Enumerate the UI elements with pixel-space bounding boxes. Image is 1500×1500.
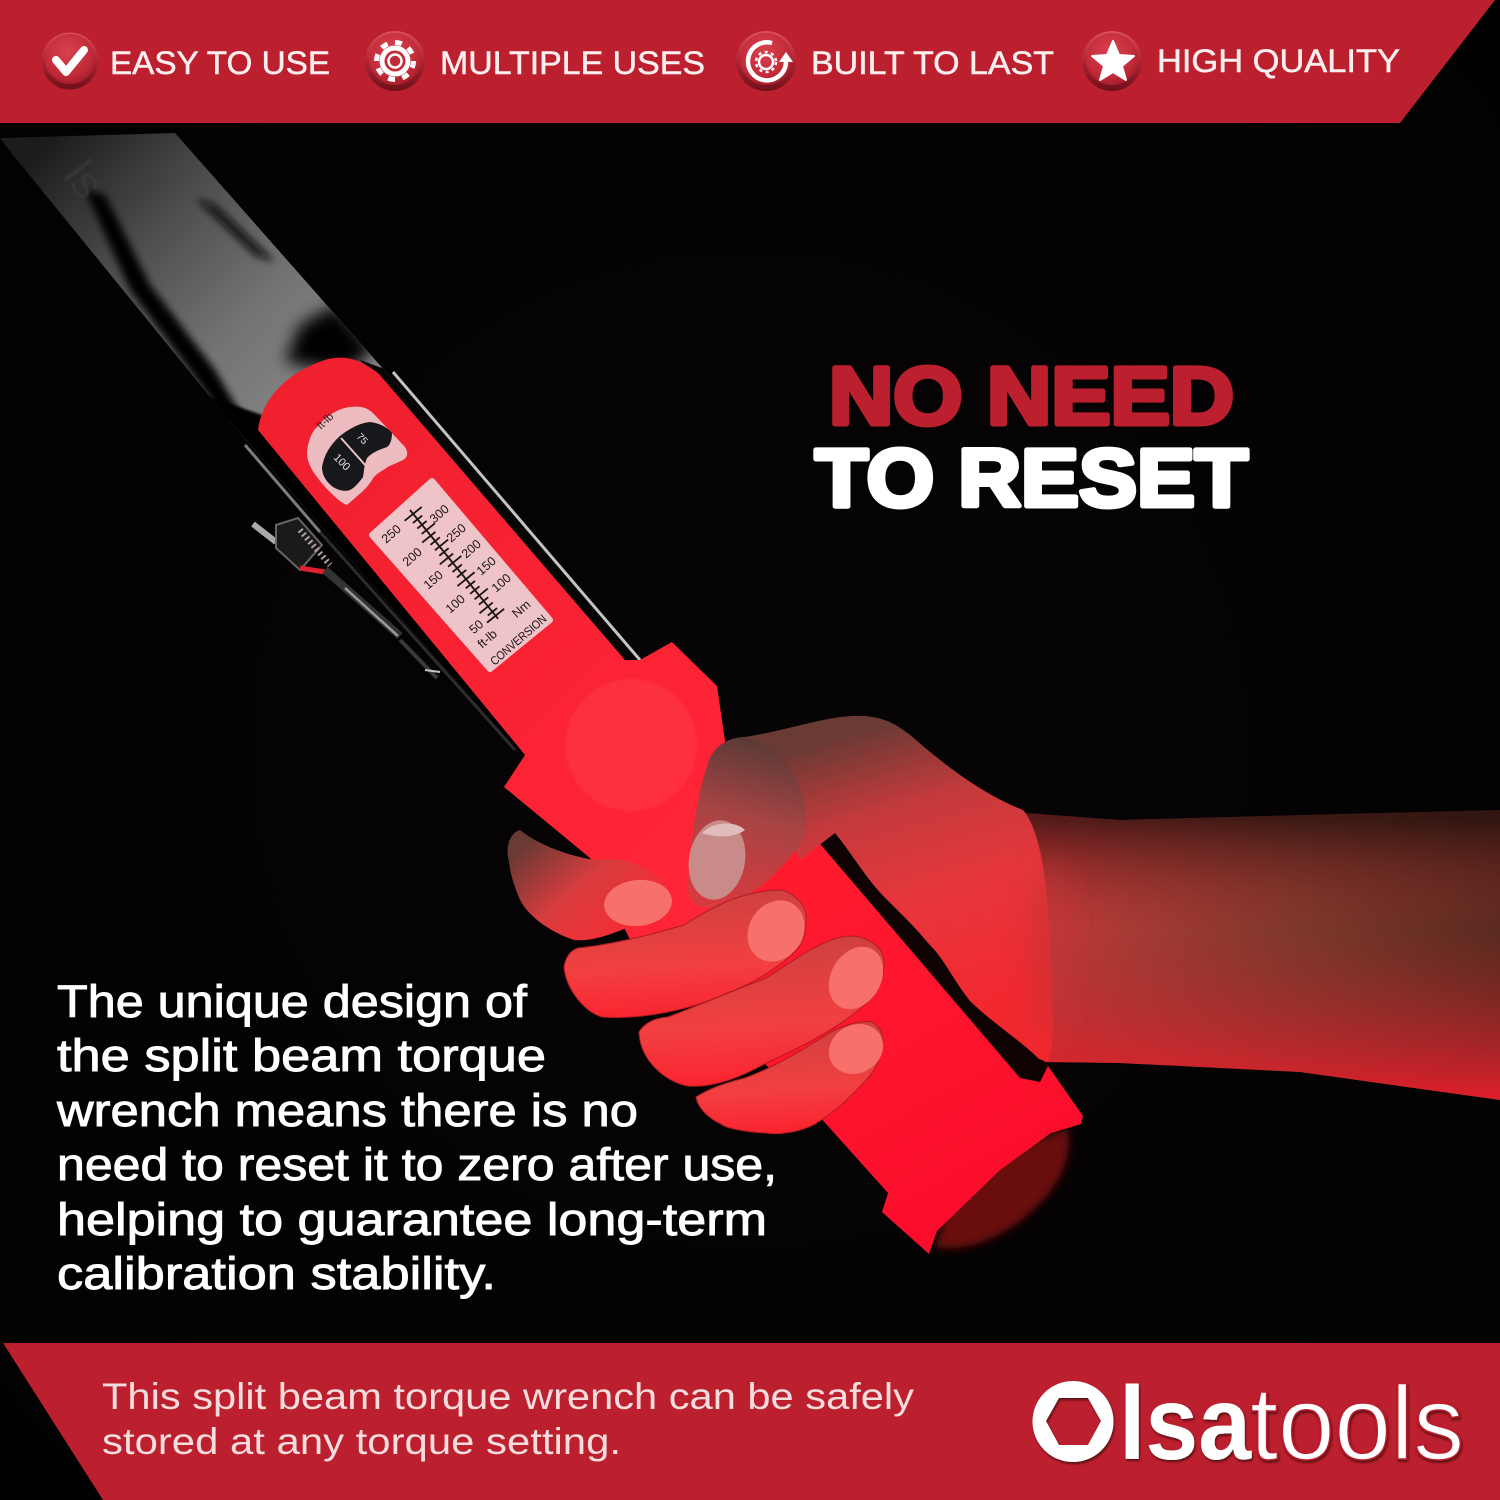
benefit: built to last: BUILT TO LAST (811, 45, 1054, 81)
benefit: multiple uses (365, 31, 705, 91)
brand logo: Olsatools (1033, 1366, 1464, 1482)
icon: gear (365, 31, 425, 91)
conversion scale labels: CONVERSION (487, 612, 549, 668)
conversion scale labels: 300 (427, 502, 452, 526)
torque gauge window (307, 407, 407, 505)
benefit: high quality: HIGH QUALITY (1157, 43, 1400, 79)
conversion scale labels: 150 (474, 554, 499, 578)
ring fingernail (818, 937, 894, 1019)
red plastic handle upper (258, 358, 740, 960)
conversion scale window (372, 481, 550, 669)
conversion scale labels: 250 (444, 521, 469, 545)
benefit: easy to use (42, 32, 330, 90)
icon: check mark (42, 32, 98, 90)
thumbnail moon (702, 824, 745, 836)
ratchet mechanism on wrench side (253, 518, 440, 678)
conversion scale labels: 100 (443, 592, 468, 616)
description paragraph (56, 976, 777, 1299)
torque gauge window: 75 (354, 431, 370, 447)
faint engraved brand on beam: ls (54, 150, 116, 208)
description paragraph: helping to guarantee long-term (57, 1194, 767, 1245)
ring finger (639, 936, 884, 1086)
conversion scale labels: 200 (400, 545, 425, 569)
brand logo: Olsatools: tools (1250, 1366, 1464, 1482)
round badge on handle (565, 679, 697, 811)
middle finger (564, 890, 806, 1018)
storage note: This split beam torque wrench can be safely (102, 1376, 915, 1417)
back of hand and palm (745, 716, 1053, 1062)
red plastic handle lower (720, 831, 1083, 1254)
headline (815, 351, 1248, 524)
index finger (508, 830, 673, 940)
index fingernail (602, 877, 674, 929)
description paragraph: The unique design of (57, 976, 528, 1027)
conversion scale labels: 250 (379, 522, 404, 546)
brand logo: Olsatools: lsa (1119, 1366, 1252, 1482)
conversion scale labels: 150 (421, 568, 446, 592)
benefit: multiple uses: MULTIPLE USES (440, 45, 705, 81)
little fingernail (820, 1015, 892, 1083)
black rubber grip strip (803, 825, 1060, 1088)
headline line: no need: NO NEED (829, 351, 1234, 442)
bottom red banner (3, 1343, 1500, 1500)
benefit: easy to use: EASY TO USE (110, 45, 330, 81)
torque wrench photo illustration (0, 133, 1500, 1254)
benefit: built to last (736, 31, 1054, 91)
forearm (1000, 810, 1500, 1100)
storage note (102, 1376, 915, 1462)
top red banner (0, 0, 1495, 123)
conversion scale labels (379, 502, 549, 668)
icon: star (1082, 31, 1142, 91)
thumbnail (682, 816, 752, 904)
description paragraph: need to reset it to zero after use, (57, 1139, 777, 1190)
conversion scale labels: 200 (459, 537, 484, 561)
description paragraph: wrench means there is no (56, 1085, 638, 1136)
wrist blend (1030, 860, 1070, 1040)
middle fingernail (736, 890, 816, 972)
forearm red lower glow (1020, 810, 1500, 1100)
little finger (696, 1022, 883, 1134)
dark end cap of handle (935, 1128, 1069, 1248)
icon: gear with cycle arrow (736, 31, 796, 91)
torque gauge window: ft-lb (315, 411, 336, 432)
description paragraph: the split beam torque (57, 1030, 546, 1081)
storage note: stored at any torque setting. (102, 1421, 621, 1462)
conversion scale ticks (401, 503, 507, 626)
conversion scale labels: Nm (509, 597, 533, 621)
wrench steel beam (0, 133, 650, 770)
torque gauge window: 100 (331, 452, 352, 473)
conversion scale labels: ft-lb (475, 627, 500, 651)
thumb (688, 737, 806, 908)
conversion scale labels: 50 (467, 617, 486, 637)
headline line: to reset: TO RESET (815, 433, 1248, 524)
description paragraph: calibration stability. (57, 1248, 496, 1299)
conversion scale labels: 100 (489, 571, 514, 595)
benefit: high quality (1082, 31, 1400, 91)
